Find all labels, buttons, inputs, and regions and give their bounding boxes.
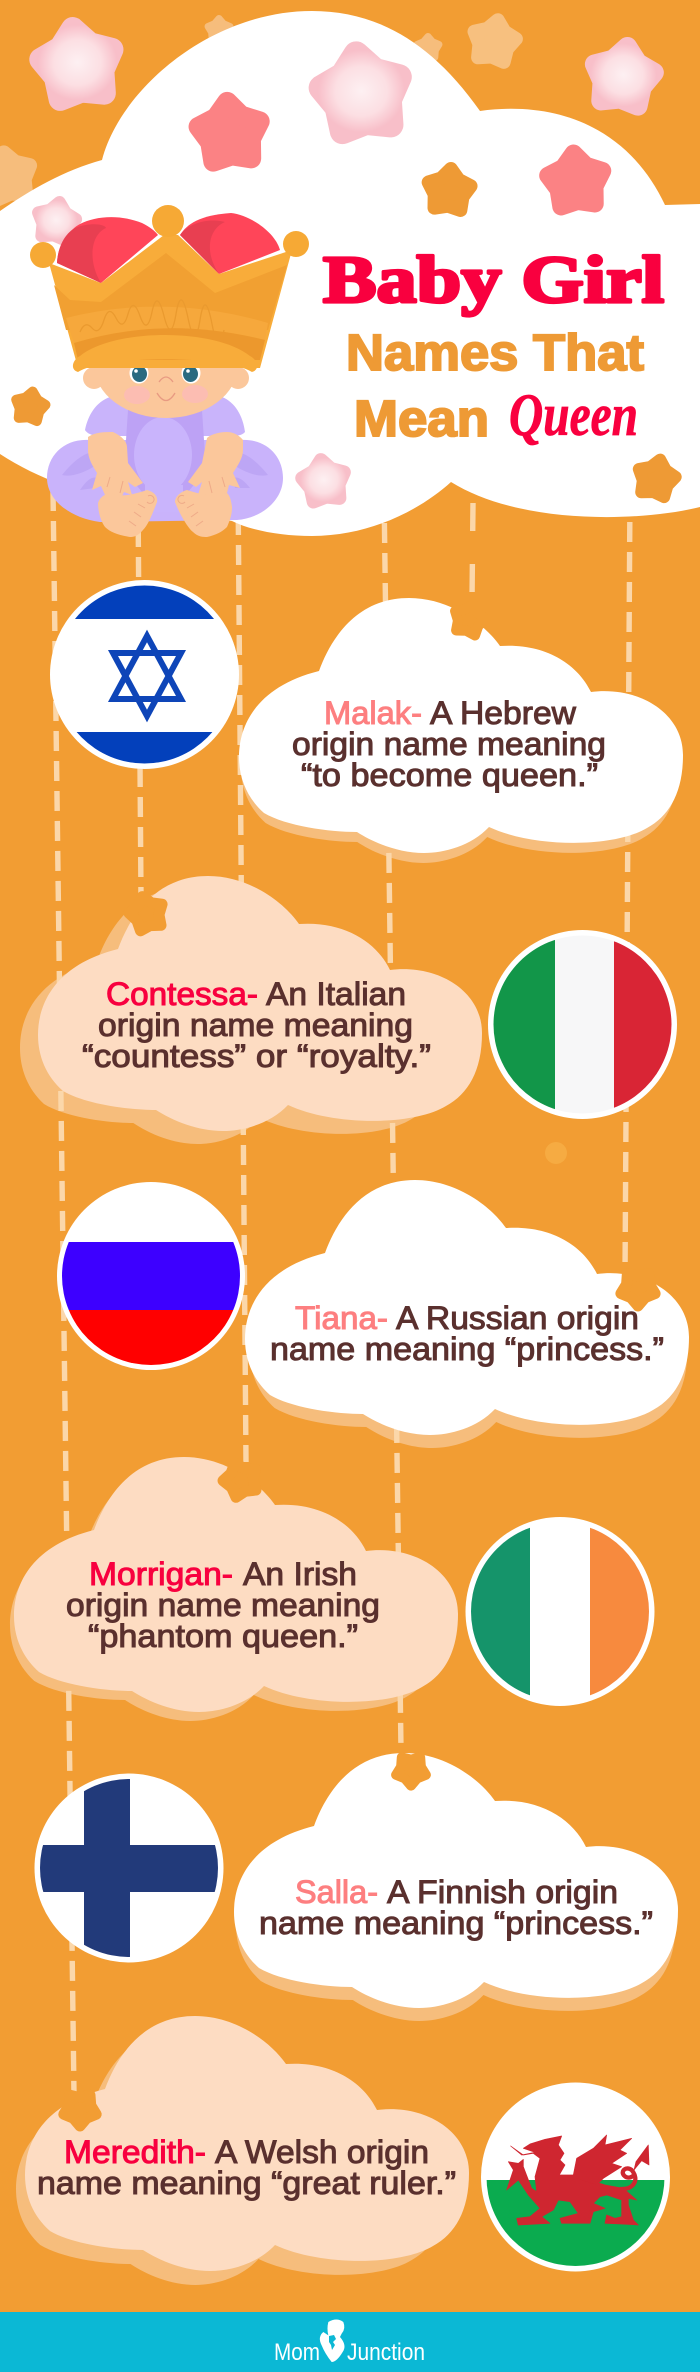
header star: large pink centre <box>317 49 406 134</box>
text: Salla- <box>295 1874 378 1910</box>
star <box>219 1457 262 1500</box>
cloud <box>25 2016 469 2271</box>
text <box>259 1874 653 1941</box>
text: “countess” or “royalty.” <box>82 1038 431 1074</box>
logo: MomJunction <box>274 2319 425 2366</box>
ears <box>83 367 249 389</box>
header star: faint behind cloud <box>208 18 230 39</box>
cheeks <box>124 385 208 404</box>
header star: faint left <box>0 149 34 201</box>
title line 1: Baby Girl <box>323 243 664 317</box>
cloud <box>234 1753 678 2008</box>
text: A Hebrew <box>430 695 577 731</box>
header star: orange bottom right <box>634 456 679 499</box>
dragon tail arrow <box>634 2145 649 2170</box>
crown inner <box>54 253 287 330</box>
dragon body <box>507 2136 638 2225</box>
header star: faint behind cloud right <box>417 36 439 57</box>
logo text: Junction: Junction <box>347 2339 425 2366</box>
small decorative dot <box>545 1142 567 1164</box>
shirt sleeves <box>85 393 245 436</box>
right foot <box>175 490 232 537</box>
text: name meaning “great ruler.” <box>37 2165 456 2201</box>
left arm and hand <box>88 432 143 500</box>
header star: pink top right <box>590 42 657 108</box>
torso shade <box>124 410 206 512</box>
text <box>66 1556 380 1654</box>
skirt <box>47 440 283 522</box>
header star: peach top <box>470 16 519 63</box>
cloud shadows <box>10 608 687 2285</box>
header star: coral right <box>546 151 605 208</box>
text: Tiana- <box>295 1300 388 1336</box>
text: origin name meaning <box>66 1587 380 1623</box>
torso light centre <box>134 417 192 493</box>
text: An Italian <box>266 976 406 1012</box>
cloud <box>38 876 482 1131</box>
red velvet left <box>57 217 158 283</box>
logo icon baby <box>329 2335 336 2350</box>
title line 2: Names That <box>346 324 644 381</box>
nose and mouth <box>157 377 175 400</box>
text: “phantom queen.” <box>88 1618 358 1654</box>
flag: Israel <box>50 580 240 772</box>
footer bar <box>0 2312 700 2372</box>
header star: small pink bottom <box>300 457 348 503</box>
text <box>37 2134 456 2201</box>
baby with crown illustration <box>30 205 309 537</box>
text: An Irish <box>243 1556 357 1592</box>
cloud <box>14 1457 458 1712</box>
text: origin name meaning <box>292 726 606 762</box>
text: A Russian origin <box>396 1300 639 1336</box>
velvet shade right <box>180 221 225 274</box>
text: Contessa- <box>106 976 258 1012</box>
star <box>450 600 488 637</box>
card: Meredith <box>25 2016 469 2271</box>
star <box>396 1757 426 1786</box>
crown band scrolls <box>80 300 224 344</box>
text: Morrigan- <box>89 1556 233 1592</box>
card: Contessa <box>38 876 482 1131</box>
text <box>82 976 431 1074</box>
card: Malak <box>239 598 683 853</box>
cloud <box>239 598 683 853</box>
header star: orange <box>426 167 472 211</box>
flag: Ireland <box>466 1517 655 1710</box>
logo text: Mom: Mom <box>274 2339 320 2366</box>
header star: pink behind crown <box>34 199 78 241</box>
text: A Finnish origin <box>387 1874 618 1910</box>
left foot <box>98 490 157 537</box>
text: A Welsh origin <box>215 2134 429 2170</box>
velvet shade left <box>57 224 106 283</box>
skirt folds <box>62 452 268 490</box>
text: “to become queen.” <box>301 757 598 793</box>
red velvet right <box>180 213 280 274</box>
flag: Wales <box>481 2082 671 2275</box>
logo icon <box>320 2319 344 2362</box>
text <box>270 1300 664 1367</box>
torso lower <box>145 485 183 512</box>
header white cloud <box>0 11 700 536</box>
card: Morrigan <box>14 1457 458 1712</box>
red dragon <box>507 2135 649 2225</box>
text: name meaning “princess.” <box>259 1905 653 1941</box>
title <box>323 243 664 448</box>
card: Salla <box>234 1753 678 2008</box>
star <box>621 1273 655 1306</box>
star <box>64 2095 96 2126</box>
header star: coral <box>197 99 263 163</box>
text: name meaning “princess.” <box>270 1331 664 1367</box>
text: Meredith- <box>64 2134 206 2170</box>
toe lines <box>107 477 225 526</box>
crown brim <box>73 335 257 372</box>
head <box>94 312 238 418</box>
dragon wing <box>573 2135 632 2185</box>
flag: Russia <box>55 1182 247 1370</box>
dragon tail curl <box>620 2168 635 2189</box>
crown balls <box>30 205 309 268</box>
header star: large pink top left <box>37 24 118 101</box>
dashed hanging strings <box>53 485 630 2095</box>
flag: Finland <box>34 1770 225 1970</box>
header star: small orange left <box>13 389 48 422</box>
crown band <box>66 307 268 343</box>
star <box>126 892 167 932</box>
right arm and hand <box>188 432 243 498</box>
cloud <box>245 1180 689 1435</box>
crown darker strip <box>74 328 265 360</box>
flag: Italy <box>488 930 679 1120</box>
card: Tiana <box>245 1180 689 1435</box>
title line 3: Mean <box>354 390 489 447</box>
text: origin name meaning <box>98 1007 413 1043</box>
text <box>292 695 606 793</box>
text: Malak- <box>324 695 422 731</box>
crown body <box>49 235 292 368</box>
eyes <box>130 362 200 384</box>
title word: Queen: Queen <box>509 382 638 448</box>
